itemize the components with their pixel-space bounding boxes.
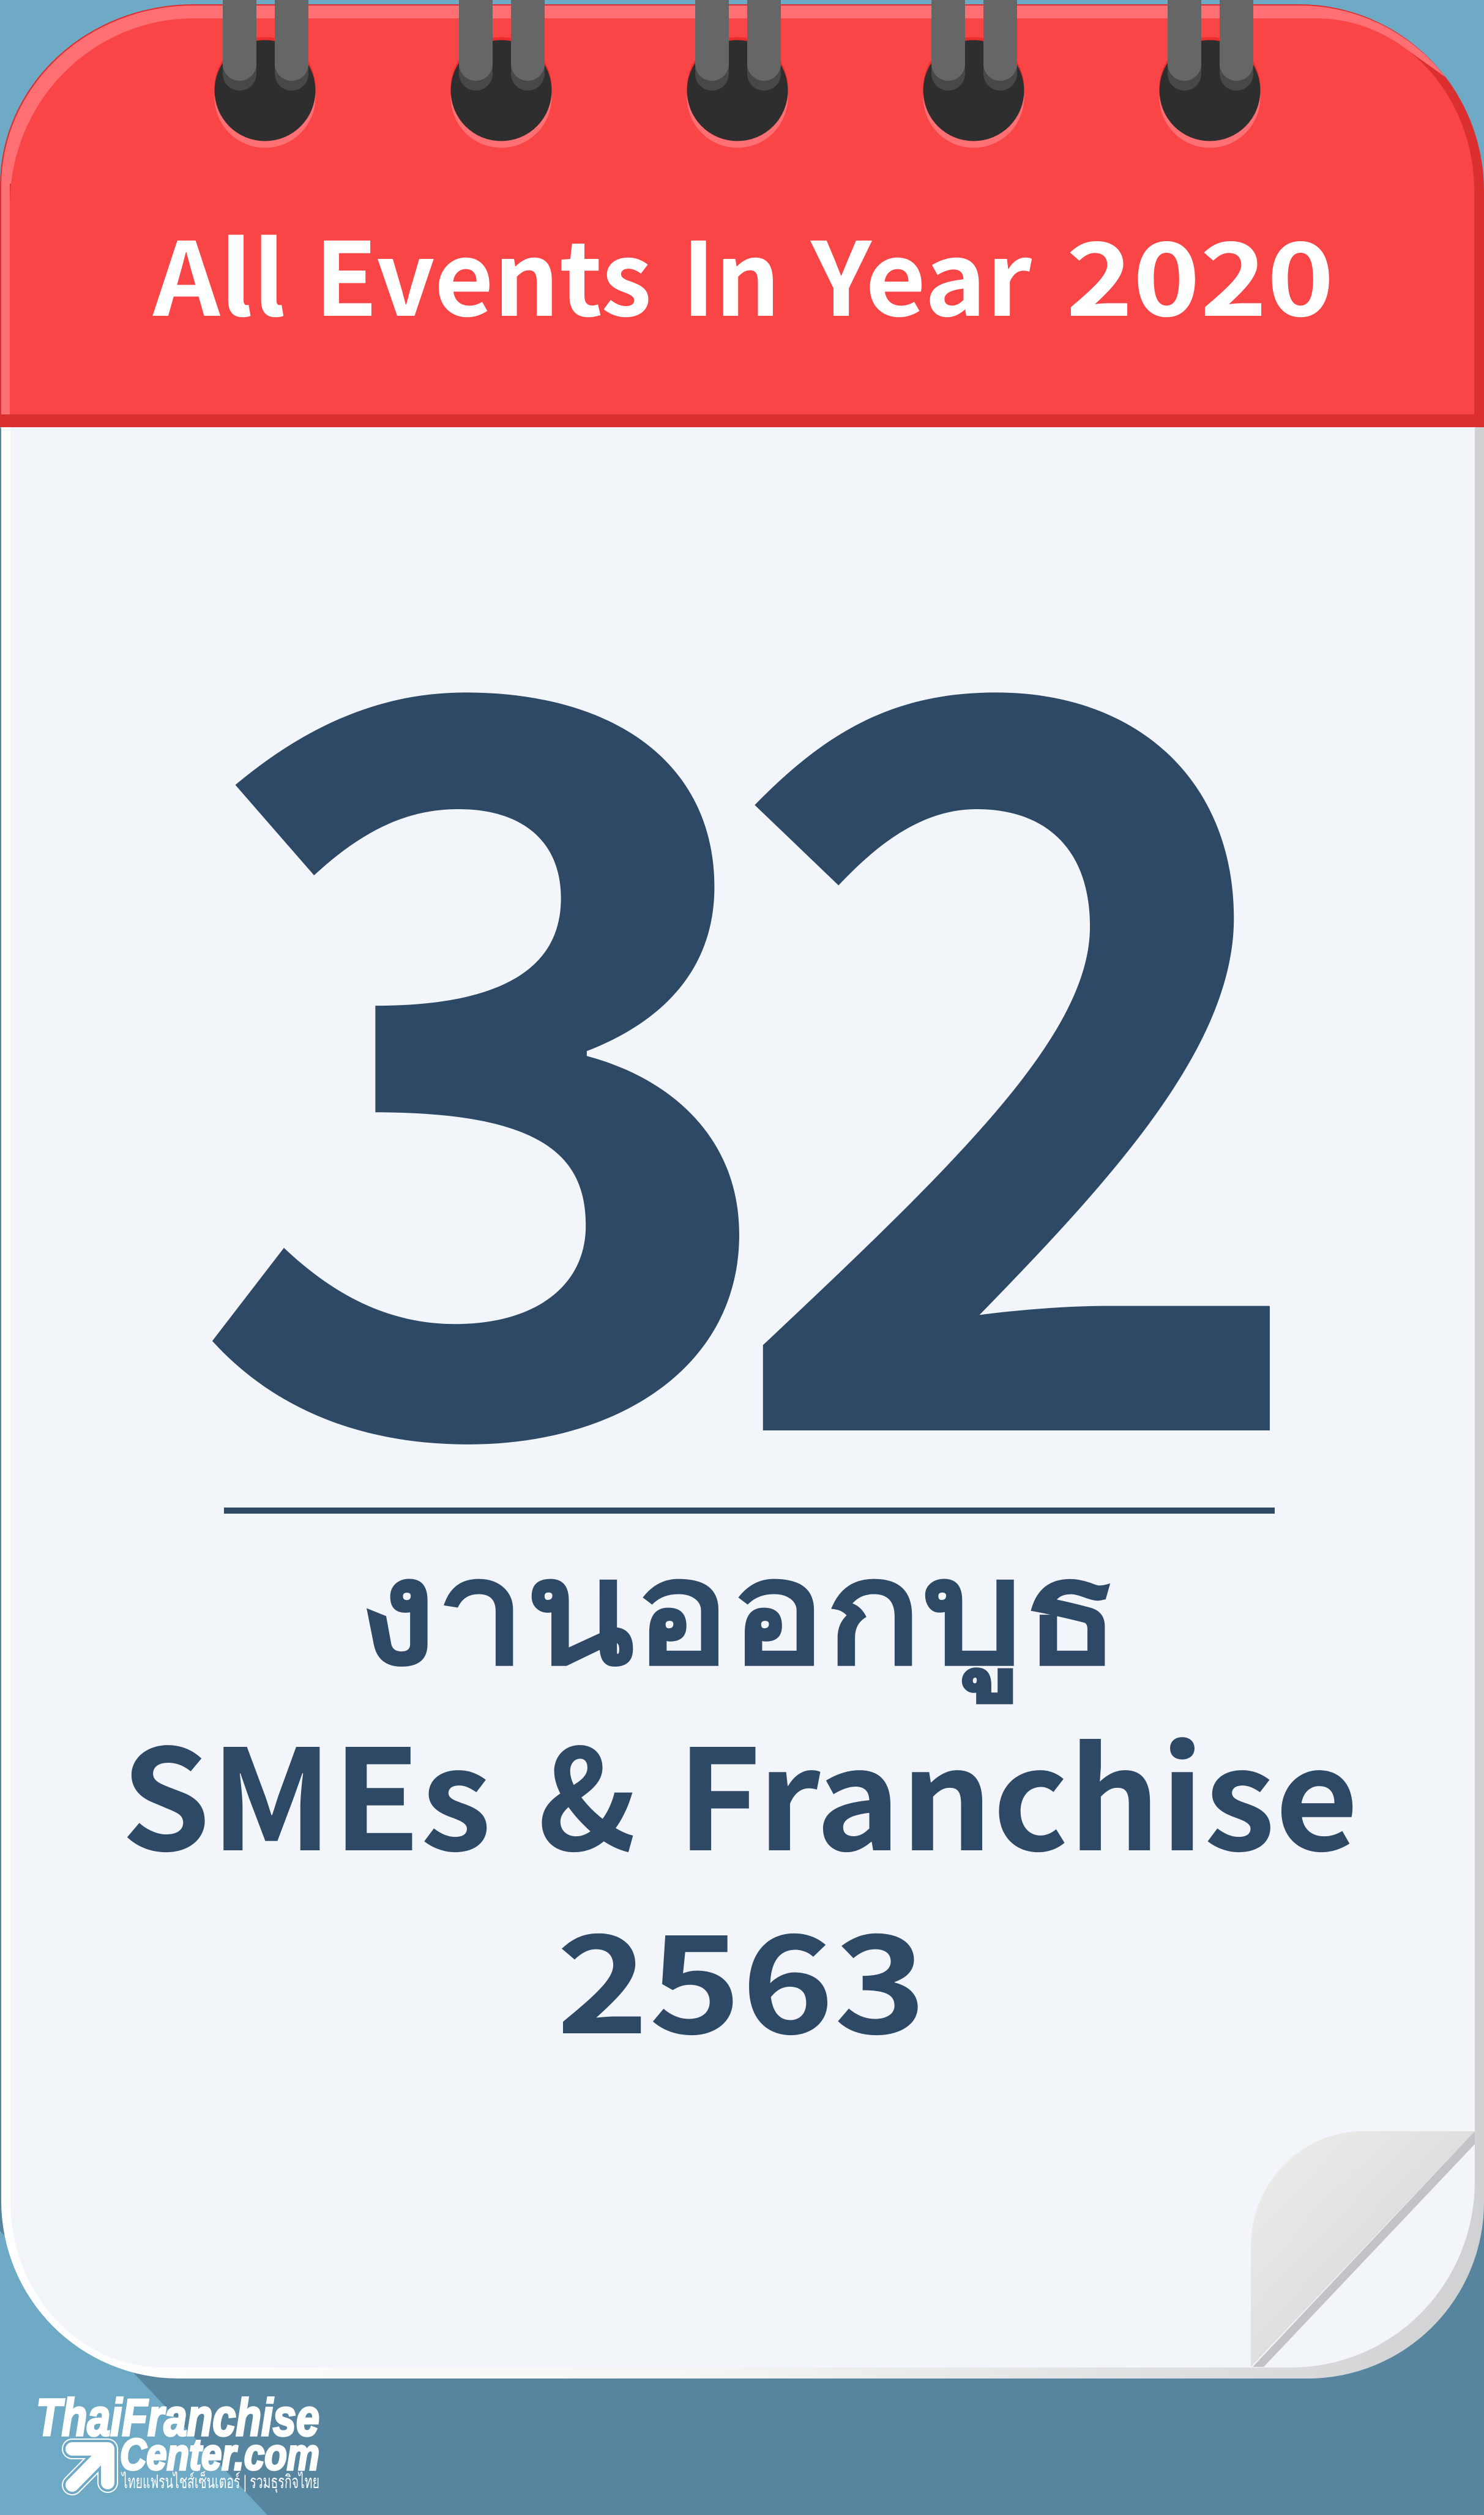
red calendar header <box>0 4 1484 427</box>
title: All <box>152 198 286 345</box>
heading line: SMEs & Franchise: SMEs <box>121 1689 491 1891</box>
title: In <box>682 198 780 345</box>
heading line: SMEs & Franchise <box>121 1689 1359 1891</box>
binding holes and rings <box>214 0 1261 148</box>
icon: logo arrow <box>72 2449 108 2485</box>
page curl <box>1251 2131 1475 2367</box>
title <box>152 198 1334 345</box>
big number 32: 3 <box>185 267 797 1720</box>
big number 32 <box>185 267 1322 1720</box>
title: 2020 <box>1066 198 1334 345</box>
heading line: 2563: 2563 <box>556 1875 927 2072</box>
divider <box>224 1508 1275 1514</box>
logo tagline: ไทยแฟรนไชส์เซ็นเตอร์ | รวมธุรกิจไทย <box>121 2470 319 2494</box>
ring 3 <box>687 0 788 148</box>
ring 4 <box>923 0 1024 148</box>
ring 1 <box>214 0 316 148</box>
thai heading: งานออกบูธ <box>359 1494 1120 1706</box>
logo: ThaiFranchise Center.com <box>36 2389 319 2494</box>
calendar page <box>1 427 1484 2379</box>
big number 32: 2 <box>719 267 1322 1720</box>
heading line: SMEs & Franchise: & <box>538 1689 636 1891</box>
ring 2 <box>450 0 552 148</box>
logo wordmark second line: Center.com <box>120 2431 319 2479</box>
ring 5 <box>1159 0 1261 148</box>
logo wordmark: ThaiFranchise <box>36 2389 319 2447</box>
title: Events <box>315 198 652 345</box>
title: Year <box>810 198 1032 345</box>
heading line: SMEs & Franchise: Franchise <box>677 1689 1359 1891</box>
